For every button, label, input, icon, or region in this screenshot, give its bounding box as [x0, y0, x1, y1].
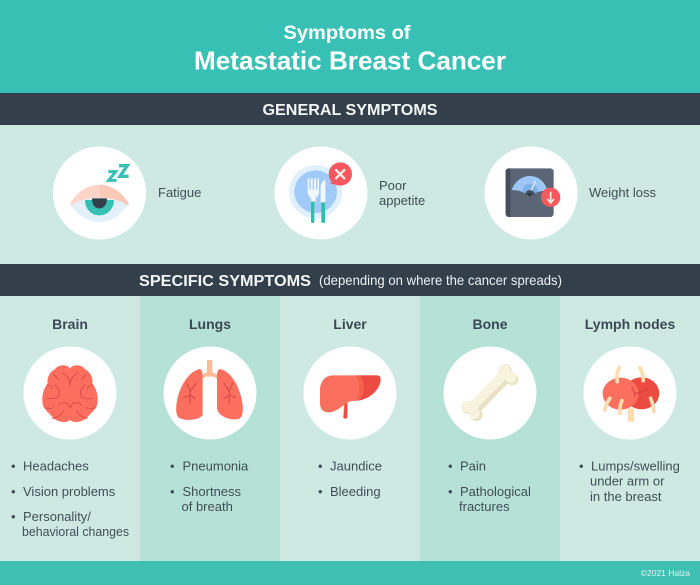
list: lungs symptoms: • [170, 484, 175, 499]
heading: liver: Liver [333, 316, 367, 332]
list: lymph nodes symptoms: in the breast [590, 489, 662, 504]
panel: lungs [140, 296, 280, 561]
list: lungs symptoms [170, 458, 249, 514]
icon: brain [24, 346, 116, 440]
list: lungs symptoms: • [170, 458, 175, 474]
list: bone symptoms: fractures [459, 499, 510, 514]
list: lungs symptoms: Shortness [182, 484, 242, 499]
list: brain symptoms: • [11, 484, 16, 499]
list: liver symptoms [318, 458, 382, 499]
list: lungs symptoms: of breath [182, 499, 233, 514]
icon: lymph nodes [584, 346, 676, 440]
title: Metastatic Breast Cancer [194, 46, 506, 76]
icon: lungs [164, 346, 256, 440]
general symptoms header [0, 93, 700, 125]
label: poor appetite: Poor [379, 178, 407, 193]
icon: bone [444, 346, 536, 440]
icon: weight scale [484, 146, 578, 240]
footer [0, 561, 700, 585]
general symptoms header: GENERAL SYMPTOMS [262, 102, 438, 119]
panel: general symptoms [0, 93, 700, 264]
specific symptoms header [0, 264, 700, 296]
heading: brain: Brain [52, 316, 88, 332]
list: bone symptoms: • [448, 484, 453, 499]
heading: lymph nodes: Lymph nodes [585, 316, 675, 332]
label: weight loss: Weight loss [589, 185, 656, 200]
list: liver symptoms: • [318, 484, 323, 499]
panel: liver [280, 296, 420, 561]
list: brain symptoms: • [11, 458, 16, 474]
specific symptoms header: SPECIFIC SYMPTOMS [139, 273, 311, 290]
list: lymph nodes symptoms: • [579, 458, 584, 474]
list: liver symptoms: Bleeding [330, 484, 381, 499]
list: liver symptoms: Jaundice [330, 458, 382, 474]
icon: liver [304, 346, 396, 440]
list: brain symptoms: Personality/ [23, 509, 91, 524]
title banner [0, 0, 700, 93]
heading: bone: Bone [472, 316, 508, 332]
list: lymph nodes symptoms: under arm or [590, 474, 665, 488]
title: Symptoms of [284, 23, 411, 44]
list: lymph nodes symptoms [579, 458, 680, 504]
specific symptoms header: (depending on where the cancer spreads) [319, 272, 562, 288]
list: brain symptoms [11, 458, 129, 539]
list: bone symptoms: • [448, 458, 453, 474]
list: brain symptoms: Vision problems [23, 484, 116, 499]
list: liver symptoms: • [318, 458, 323, 474]
panel: lymph nodes [560, 296, 700, 561]
list: brain symptoms: Headaches [23, 458, 89, 474]
icon: poor appetite plate [274, 146, 368, 240]
panel: bone [420, 296, 560, 561]
label: poor appetite: appetite [379, 193, 425, 208]
label: fatigue: Fatigue [158, 185, 201, 200]
list: brain symptoms: • [11, 509, 16, 524]
heading: lungs: Lungs [189, 316, 231, 332]
panel: brain [0, 296, 140, 561]
credit: ©2021 Halza [641, 568, 690, 578]
list: lymph nodes symptoms: Lumps/swelling [591, 458, 680, 474]
icon: fatigue eye [53, 146, 146, 240]
list: lungs symptoms: Pneumonia [182, 458, 249, 474]
list: brain symptoms: behavioral changes [22, 524, 129, 539]
list: bone symptoms: Pain [460, 458, 486, 474]
label: poor appetite [379, 178, 425, 208]
list: bone symptoms [448, 458, 531, 514]
list: bone symptoms: Pathological [460, 484, 531, 499]
title [194, 23, 506, 76]
